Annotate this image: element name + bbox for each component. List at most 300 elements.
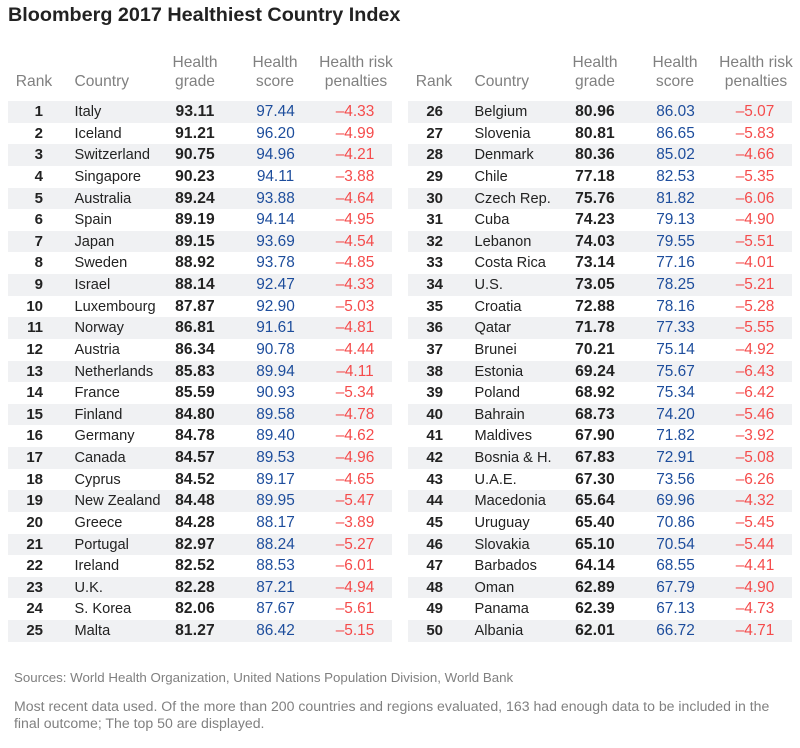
column headers: grade [575,73,615,90]
row 16: –4.62 [336,427,374,444]
row 42: 72.91 [656,449,695,466]
methodology note: Most recent data used. Of the more than 200 countries and regions evaluated, 163 had enough data to be included in the [14,698,769,714]
row 4 [34,168,374,185]
row 45: –5.45 [736,514,774,531]
row 15: –4.78 [336,406,374,423]
row 43 [426,471,774,488]
row 23: 82.28 [175,579,215,596]
row 33: Costa Rica [474,255,546,271]
row 5: 93.88 [256,190,295,206]
row 30: 81.82 [656,190,695,206]
row 49: Panama [474,601,529,617]
row 33 [426,254,774,271]
row 20: Greece [74,515,122,531]
row 29: Chile [474,169,508,185]
row 26: 80.96 [575,103,615,120]
row 35: 78.16 [656,298,695,315]
row 38: 69.24 [575,362,615,380]
row 17: Canada [74,450,126,466]
row 18: –4.65 [336,471,374,488]
row 28: Denmark [474,147,534,163]
row 50: 50 [426,622,443,639]
row 35 [426,298,774,315]
row 34: U.S. [474,277,503,293]
row 15: 15 [26,406,43,423]
row 14 [26,384,374,401]
row 43: 43 [426,471,443,488]
row 1: 1 [35,103,43,120]
row 19 [8,490,392,512]
row 27: 86.65 [656,125,695,142]
panel: ranks 1 to 25 table [8,54,393,642]
row 13: 85.83 [175,362,215,380]
row 21: –5.27 [336,536,374,552]
row 48: Oman [474,580,514,596]
row 41: –3.92 [736,427,774,444]
row 15: Finland [74,407,122,423]
row 31: Cuba [474,212,509,228]
row 37 [426,341,774,358]
row 8: Sweden [74,255,127,271]
row 11: 11 [27,319,43,336]
row 34: –5.21 [736,276,774,293]
row 43: 67.30 [575,471,615,488]
row 37: Brunei [474,342,517,358]
row 13: 13 [26,362,43,380]
row 37: 37 [426,341,443,358]
row 42: 67.83 [575,449,615,466]
row 29 [426,168,774,185]
row 10 [26,298,374,315]
row 34: 78.25 [656,276,695,293]
column headers: grade [175,73,215,90]
row 35: 72.88 [575,298,615,315]
row 22: –6.01 [336,557,374,574]
row 39: 75.34 [656,384,695,401]
column headers: Health [172,54,218,71]
row 41 [426,427,774,444]
row 22 [26,557,374,574]
row 27: Slovenia [474,126,530,142]
row 49: 49 [426,600,443,617]
row 48: 48 [426,579,443,596]
row 20: –3.89 [336,514,374,531]
row 43: –6.26 [736,471,774,488]
row 18: 18 [26,471,43,488]
row 32: 79.55 [656,233,695,250]
row 41: 71.82 [656,427,695,444]
row 50: 66.72 [656,622,695,639]
row 27: 27 [426,125,443,142]
row 37: 75.14 [656,341,695,358]
row 40: Bahrain [474,407,525,423]
row 21: 82.97 [175,536,215,552]
row 13 [8,360,392,382]
row 4: 4 [35,168,43,185]
row 36: Qatar [474,320,511,336]
row 9: 92.47 [256,276,295,293]
row 45 [426,514,774,531]
row 38: 75.67 [656,362,695,380]
row 21: 88.24 [256,536,295,552]
row 29: 82.53 [656,168,695,185]
row 35: Croatia [474,299,522,315]
row 40: 74.20 [656,406,695,423]
row 25: 25 [26,622,43,639]
row 39: 68.92 [575,384,615,401]
row 12: 12 [26,341,43,358]
row 26: –5.07 [736,103,774,120]
row 50 [408,620,792,642]
row 38: Estonia [474,364,523,380]
row 1: 97.44 [256,103,295,120]
row 31: –4.90 [736,211,774,228]
row 32: 74.03 [575,233,615,250]
row 19: New Zealand [74,493,160,509]
row 46: 46 [426,536,443,552]
row 44: 44 [426,492,443,509]
row 7: Japan [74,234,114,250]
sources note: Sources: World Health Organization, United Nations Population Division, World Bank [14,670,513,685]
row 45: 70.86 [656,514,695,531]
row 30 [408,188,792,209]
column headers [16,54,393,90]
row 48: –4.90 [736,579,774,596]
row 23 [8,577,392,598]
row 7: 7 [35,233,43,250]
row 28 [408,144,792,166]
row 17 [8,447,392,469]
row 25: 86.42 [256,622,295,639]
row 15: 84.80 [175,406,215,423]
row 47: –4.41 [736,557,774,574]
row 32 [408,231,792,252]
row 30: 75.76 [575,190,615,206]
row 11 [8,317,392,339]
row 16: Germany [74,428,135,444]
row 22: Ireland [74,558,119,574]
row 12: –4.44 [336,341,374,358]
row 6: –4.95 [336,211,374,228]
row 24: 24 [26,600,43,617]
row 46: Slovakia [474,536,530,552]
column headers: Health [252,54,298,71]
row 20: 88.17 [256,514,295,531]
row 12 [26,341,374,358]
row 5: –4.64 [336,190,374,206]
column headers: score [256,73,294,90]
row 17: 84.57 [175,449,215,466]
row 42: 42 [426,449,443,466]
row 38: 38 [426,362,443,380]
row 11: 86.81 [175,319,215,336]
column headers: score [656,73,694,90]
row 10: 92.90 [256,298,295,315]
row 9 [8,274,392,296]
row 1: 93.11 [176,103,214,120]
column headers: Health [572,54,618,71]
row 46: 65.10 [575,536,615,552]
row 21: Portugal [74,536,129,552]
row 45: Uruguay [474,515,530,531]
row 42: Bosnia & H. [474,450,552,466]
row 15 [8,404,392,425]
row 16 [26,427,374,444]
row 21: 21 [26,536,43,552]
row 9: 9 [35,276,43,293]
row 27: –5.83 [736,125,774,142]
row 23: U.K. [74,580,103,596]
row 40 [408,404,792,425]
row 14: 14 [26,384,43,401]
row 47: 68.55 [656,557,695,574]
row 46: 70.54 [656,536,695,552]
row 39: –6.42 [736,384,774,401]
row 6: 94.14 [256,211,295,228]
row 2: 96.20 [256,125,295,142]
row 5: 89.24 [175,190,215,206]
row 1: Italy [74,104,101,120]
row 12: Austria [74,342,120,358]
row 49: –4.73 [736,600,774,617]
row 47 [426,557,774,574]
row 26: Belgium [474,104,527,120]
row 12: 90.78 [256,341,295,358]
row 11: –4.81 [336,319,374,336]
row 2: 2 [35,125,43,142]
row 29: 77.18 [575,168,615,185]
row 49 [426,600,774,617]
row 32: 32 [426,233,443,250]
row 28: 85.02 [656,146,695,163]
row 23: 87.21 [256,579,295,596]
row 8: 93.78 [256,254,295,271]
row 8 [35,254,374,271]
row 9: 88.14 [175,276,215,293]
row 39: 39 [426,384,443,401]
row 22: 22 [26,557,43,574]
row 10: Luxembourg [74,299,156,315]
row 8: 8 [35,254,43,271]
row 14: 90.93 [256,384,295,401]
row 7: 89.15 [175,233,215,250]
row 29: 29 [426,168,443,185]
row 6: 89.19 [175,211,215,228]
column headers: Rank [416,73,452,90]
row 18: 89.17 [256,471,295,488]
row 24: S. Korea [74,601,131,617]
row 16: 89.40 [256,427,295,444]
column headers: Country [74,73,129,90]
row 36: 71.78 [575,319,615,336]
row 5 [8,188,392,209]
row 40: 68.73 [575,406,615,423]
row 45: 45 [426,514,443,531]
row 48 [408,577,792,598]
row 45: 65.40 [575,514,615,531]
row 32: –5.51 [736,233,774,250]
column headers: Health [652,54,698,71]
row 18: 84.52 [175,471,215,488]
row 48: 67.79 [656,579,695,596]
methodology note [14,698,769,731]
row 6: Spain [74,212,112,228]
row 3: 3 [35,146,43,163]
row 26: 26 [426,103,443,120]
row 17: 17 [26,449,43,466]
row 30: Czech Rep. [474,190,551,206]
row 20: 20 [26,514,43,531]
title: Bloomberg 2017 Healthiest Country Index [8,4,400,26]
row 16: 16 [26,427,43,444]
column headers [416,54,793,90]
row 40: 40 [426,406,443,423]
row 13: 89.94 [256,362,295,380]
row 14: France [74,385,120,401]
row 44: –4.32 [736,492,774,509]
row 43: U.A.E. [474,472,517,488]
row 47: 47 [426,557,443,574]
row 33: –4.01 [736,254,774,271]
row 3: 90.75 [175,146,215,163]
row 32: Lebanon [474,234,531,250]
row 1: –4.33 [336,103,374,120]
row 26: 86.03 [656,103,695,120]
row 11: Norway [74,320,124,336]
row 24: –5.61 [336,600,374,617]
row 41: 67.90 [575,427,615,444]
row 7: –4.54 [336,233,374,250]
row 18 [26,471,374,488]
column headers: Country [474,73,529,90]
row 38: –6.43 [736,362,774,380]
row 34 [408,274,792,296]
column headers: Rank [16,73,52,90]
row 25: Malta [74,623,110,639]
row 24 [26,600,374,617]
row 39 [426,384,774,401]
column headers: penalties [325,73,387,90]
row 7 [8,231,392,252]
row 47: 64.14 [575,557,615,574]
row 12: 86.34 [175,341,215,358]
row 5: 5 [35,190,43,206]
row 10: –5.03 [336,298,374,315]
row 11: 91.61 [256,319,295,336]
row 28: –4.66 [736,146,774,163]
row 15: 89.58 [256,406,295,423]
row 41: Maldives [474,428,532,444]
row 20 [26,514,374,531]
row 17: –4.96 [336,449,374,466]
panel: ranks 26 to 50 table [408,54,793,642]
row 48: 62.89 [575,579,615,596]
row 24: 82.06 [175,600,215,617]
row 34: 73.05 [575,276,615,293]
row 31: 74.23 [575,211,615,228]
row 47: Barbados [474,558,537,574]
row 1 [8,101,392,123]
row 25: 81.27 [175,622,215,639]
row 13: Netherlands [74,364,153,380]
row 28: 28 [426,146,443,163]
row 2: –4.99 [336,125,374,142]
row 24: 87.67 [256,600,295,617]
row 41: 41 [426,427,443,444]
row 44: 65.64 [575,492,615,509]
methodology note: final outcome; The top 50 are displayed. [14,715,264,731]
row 3 [8,144,392,166]
row 33: 77.16 [656,254,695,271]
row 36: 36 [426,319,443,336]
row 6: 6 [35,211,43,228]
row 36: –5.55 [736,319,774,336]
row 2: Iceland [74,126,122,142]
row 31 [426,211,774,228]
row 33: 33 [426,254,443,271]
row 50: Albania [474,623,523,639]
row 49: 62.39 [575,600,615,617]
row 16: 84.78 [175,427,215,444]
row 10: 87.87 [175,298,215,315]
row 20: 84.28 [175,514,215,531]
row 2 [35,125,374,142]
row 50: –4.71 [736,622,774,639]
row 9: Israel [74,277,110,293]
row 33: 73.14 [575,254,615,271]
row 8: –4.85 [336,254,374,271]
row 10: 10 [26,298,43,315]
row 31: 31 [426,211,443,228]
column headers: Health risk [319,54,393,71]
row 42: –5.08 [736,449,774,466]
row 44: 69.96 [656,492,695,509]
row 39: Poland [474,385,520,401]
row 2: 91.21 [175,125,215,142]
row 14: 85.59 [175,384,215,401]
row 31: 79.13 [656,211,695,228]
row 4: –3.88 [336,168,374,185]
row 30: 30 [426,190,443,206]
row 27: 80.81 [575,125,615,142]
row 42 [408,447,792,469]
row 22: 88.53 [256,557,295,574]
column headers: penalties [725,73,787,90]
row 3: –4.21 [336,146,374,163]
row 23: –4.94 [336,579,374,596]
row 19: 89.95 [256,492,295,509]
row 37: –4.92 [736,341,774,358]
row 25: –5.15 [336,622,374,639]
row 49: 67.13 [656,600,695,617]
row 44: Macedonia [474,493,546,509]
row 46 [408,534,792,555]
row 28: 80.36 [575,146,615,163]
row 35: –5.28 [736,298,774,315]
column headers: Health risk [719,54,793,71]
row 3: 94.96 [256,146,295,163]
row 4: Singapore [74,169,141,185]
row 19: 19 [26,492,43,509]
row 13: –4.11 [336,362,374,380]
row 36: 77.33 [656,319,695,336]
row 17: 89.53 [256,449,295,466]
row 23: 23 [26,579,43,596]
row 40: –5.46 [736,406,774,423]
row 3: Switzerland [74,147,150,163]
row 25 [8,620,392,642]
row 26 [408,101,792,123]
